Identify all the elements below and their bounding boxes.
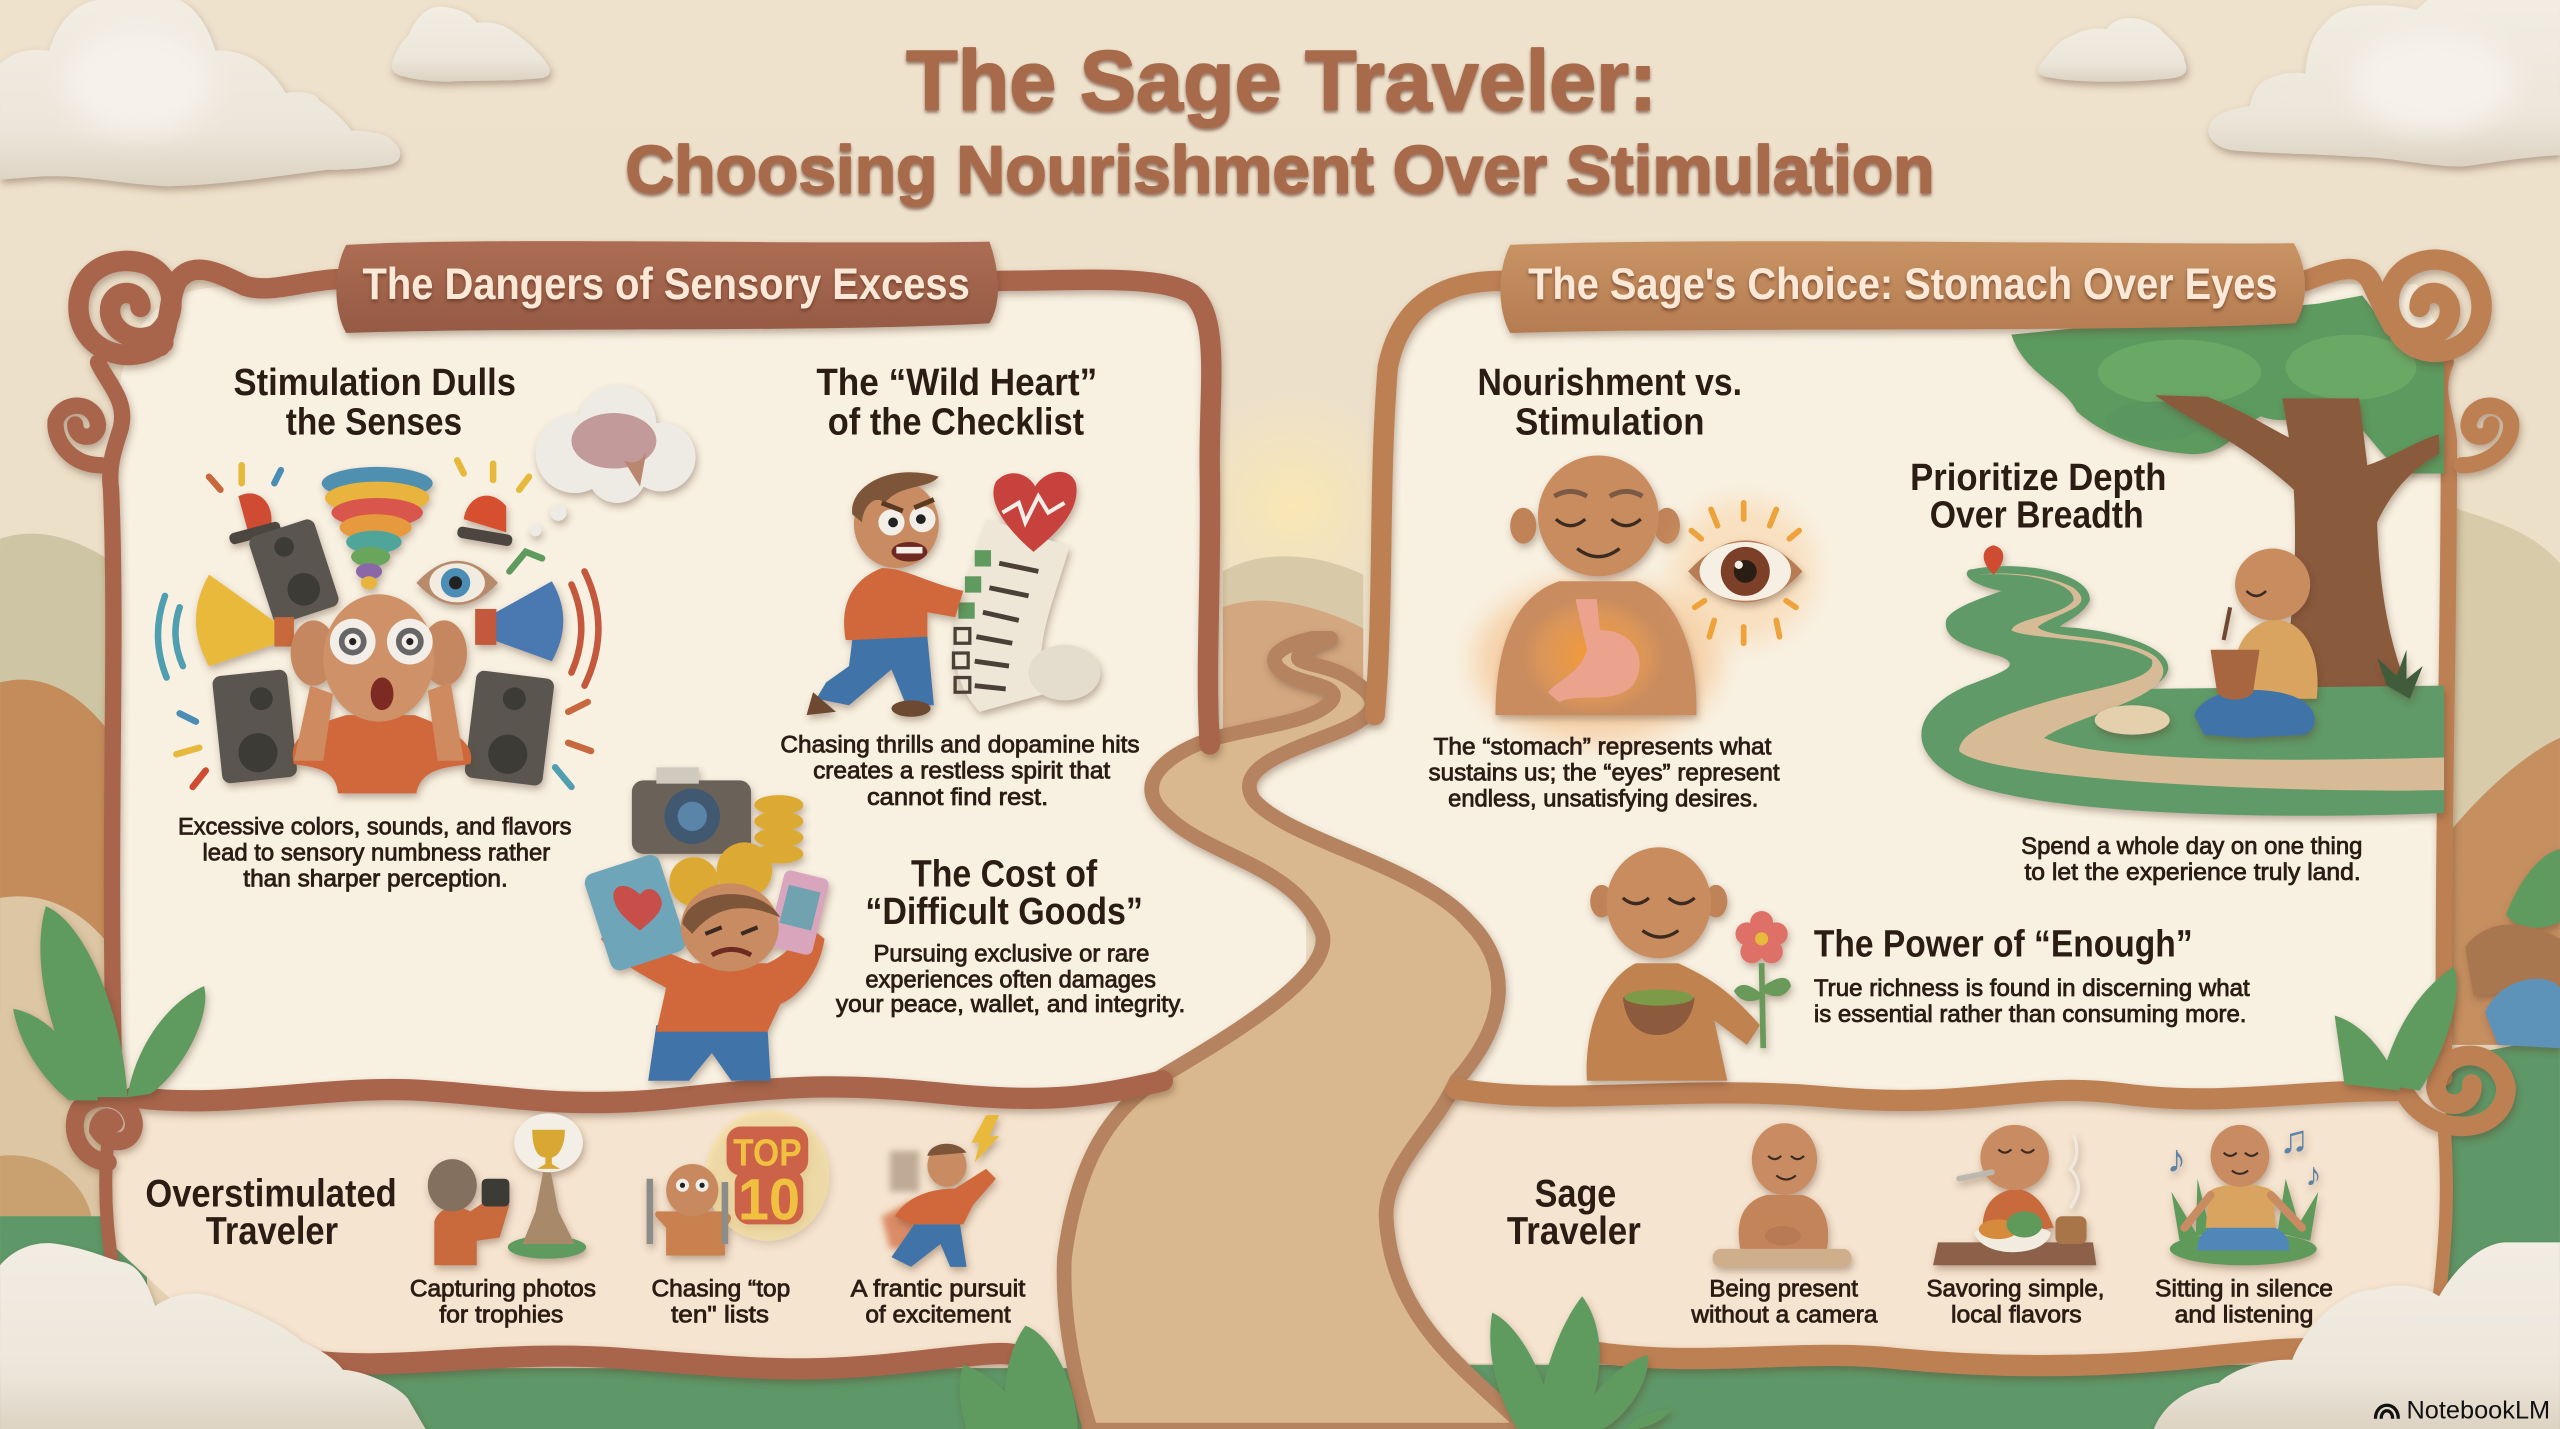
section: stimulation dulls the senses [158, 361, 696, 892]
caption: top ten lists: ten" lists [671, 1301, 769, 1328]
cloud: top left [0, 0, 400, 186]
section: prioritize depth over breadth [1910, 456, 2444, 886]
cloud: top small right [2038, 18, 2186, 82]
heading: Traveler [206, 1210, 338, 1253]
heading [816, 361, 1097, 443]
tree trunk and branches [2155, 395, 2439, 735]
frame: sage traveler panel border [1456, 1055, 2506, 1366]
icon: top ten and fork: 10 [738, 1168, 800, 1233]
description: than sharper perception. [243, 865, 508, 892]
seated sage figure [2095, 549, 2423, 738]
description [178, 813, 571, 892]
closed eyes and smile [1623, 898, 1695, 937]
icon: sitting in silence [2166, 1119, 2322, 1265]
frantic figure with checklist [807, 472, 963, 717]
tree canopy [2011, 295, 2444, 473]
section: the cost of difficult goods [582, 767, 1185, 1081]
caption: savoring simple: local flavors [1951, 1301, 2082, 1328]
figure with bowl and flower [1587, 847, 1791, 1081]
icon: top ten and fork: TOP [733, 1132, 802, 1174]
plant and rock: right edge [2335, 849, 2560, 1091]
caption: top ten lists: Chasing “top [651, 1275, 790, 1302]
motion dashes [158, 460, 598, 787]
icon: top ten and fork [650, 1110, 829, 1255]
plant: bottom centre [960, 1326, 1078, 1429]
title: Choosing Nourishment Over Stimulation [625, 133, 1935, 208]
description: lead to sensory numbness rather [202, 839, 550, 866]
caption: capturing photos: for trophies [439, 1301, 563, 1328]
winding road [1064, 638, 1528, 1429]
caption: top ten lists [651, 1275, 790, 1328]
caption: being present [1690, 1275, 1878, 1328]
icon: radiant eye [1672, 500, 1815, 643]
panel: the sage's choice background [1224, 284, 2446, 1091]
caption: savoring simple [1927, 1275, 2104, 1328]
description: creates a restless spirit that [813, 758, 1111, 785]
heading [145, 1172, 397, 1253]
caption: being present: Being present [1709, 1275, 1858, 1302]
heading: Sage [1535, 1172, 1616, 1215]
section: the power of enough [1587, 847, 2250, 1081]
description: your peace, wallet, and integrity. [836, 991, 1185, 1018]
description [1814, 975, 2250, 1028]
frame: overstimulated panel border [75, 1081, 1162, 1369]
plant: left [13, 906, 205, 1100]
heading: “Difficult Goods” [865, 890, 1143, 933]
caption: sitting in silence [2155, 1275, 2333, 1328]
title: The Sage Traveler: [906, 32, 1657, 127]
heading: The “Wild Heart” [816, 361, 1097, 404]
cloud: top small left [392, 7, 550, 82]
description [836, 941, 1185, 1018]
section: sage traveler [1507, 1119, 2333, 1328]
section: nourishment vs stimulation [1429, 361, 1815, 812]
description: Pursuing exclusive or rare [873, 941, 1149, 968]
description [780, 732, 1140, 811]
heading: Stimulation [1515, 400, 1704, 443]
caption: frantic pursuit: A frantic pursuit [851, 1275, 1026, 1302]
description: to let the experience truly land. [2024, 859, 2361, 886]
winding path on green island [1921, 545, 2444, 816]
heading: Prioritize Depth [1910, 456, 2166, 499]
description: True richness is found in discerning what [1814, 975, 2250, 1002]
cloud: top right [2208, 0, 2560, 167]
frame: sage's choice swirls and connector [2305, 260, 2511, 465]
title [625, 32, 1935, 208]
panel: overstimulated traveler background [108, 1091, 1176, 1368]
description: cannot find rest. [867, 784, 1048, 811]
description: Chasing thrills and dopamine hits [780, 732, 1140, 759]
description [2021, 833, 2362, 886]
thought cloud with brain [530, 385, 696, 536]
heading [1910, 456, 2166, 536]
heading plate: the sage's choice: The Sage's Choice: Stomach Over Eyes [1528, 258, 2278, 309]
description: is essential rather than consuming more. [1814, 1001, 2246, 1028]
heading: The Power of “Enough” [1814, 923, 2193, 966]
figure with glowing stomach [1474, 455, 1719, 743]
caption: frantic pursuit: of excitement [865, 1301, 1011, 1328]
heading plate: the sage's choice [1500, 241, 2305, 333]
caption: sitting in silence: and listening [2175, 1301, 2313, 1328]
panel: sage traveler background [1371, 1091, 2446, 1363]
description: The “stomach” represents what [1433, 733, 1772, 760]
heading: Stimulation Dulls [234, 361, 516, 404]
heading: Over Breadth [1930, 493, 2144, 536]
caption: capturing photos [410, 1275, 596, 1328]
heading plate: the dangers of sensory excess: The Dangers of Sensory Excess [362, 258, 970, 309]
caption: frantic pursuit [851, 1275, 1026, 1328]
heading [234, 361, 516, 443]
icon: photographer and eiffel tower [428, 1113, 586, 1265]
description: Excessive colors, sounds, and flavors [178, 813, 571, 840]
description: sustains us; the “eyes” represent [1429, 759, 1780, 786]
icon: savoring local flavors [1933, 1125, 2096, 1265]
icon: sitting in silence: ♪ [2166, 1138, 2186, 1181]
description [1429, 733, 1780, 812]
caption: sitting in silence: Sitting in silence [2155, 1275, 2333, 1302]
section: overstimulated traveler [145, 1110, 1026, 1328]
caption: savoring simple: Savoring simple, [1927, 1275, 2104, 1302]
NotebookLM logo: NotebookLM [2406, 1397, 2550, 1425]
panel: dangers of sensory excess background [118, 281, 1306, 1091]
description: Spend a whole day on one thing [2021, 833, 2362, 860]
description: experiences often damages [865, 967, 1156, 994]
heading [865, 852, 1143, 933]
frame: sage's choice panel border [1375, 281, 2449, 1078]
burdened figure with camera and coins [582, 767, 830, 1081]
heading [1478, 361, 1742, 443]
heading: the Senses [286, 400, 462, 443]
description: endless, unsatisfying desires. [1448, 785, 1758, 812]
heading plate: the dangers of sensory excess [336, 241, 998, 333]
caption: being present: without a camera [1690, 1301, 1878, 1328]
heading [1507, 1172, 1641, 1253]
heading: of the Checklist [828, 400, 1084, 443]
overwhelming sensory objects [196, 467, 563, 786]
confused figure covering ears [291, 594, 471, 793]
icon: sitting in silence: ♪ [2305, 1155, 2322, 1192]
heading: Traveler [1507, 1210, 1641, 1253]
cloud: bottom left [0, 1243, 426, 1429]
icon: frantic runner with lightning [882, 1115, 999, 1267]
heading: The Cost of [911, 852, 1097, 895]
checklist scroll [953, 472, 1100, 712]
plant: bottom right of road [1490, 1296, 1672, 1429]
heading: Nourishment vs. [1478, 361, 1742, 404]
heading: Overstimulated [145, 1172, 397, 1215]
frame: dangers panel border [55, 261, 1211, 1084]
section: wild heart of the checklist [780, 361, 1140, 811]
icon: present without a camera [1713, 1123, 1851, 1267]
icon: sitting in silence: ♫ [2279, 1119, 2309, 1162]
caption: capturing photos: Capturing photos [410, 1275, 596, 1302]
cloud: bottom right [2153, 1242, 2560, 1429]
